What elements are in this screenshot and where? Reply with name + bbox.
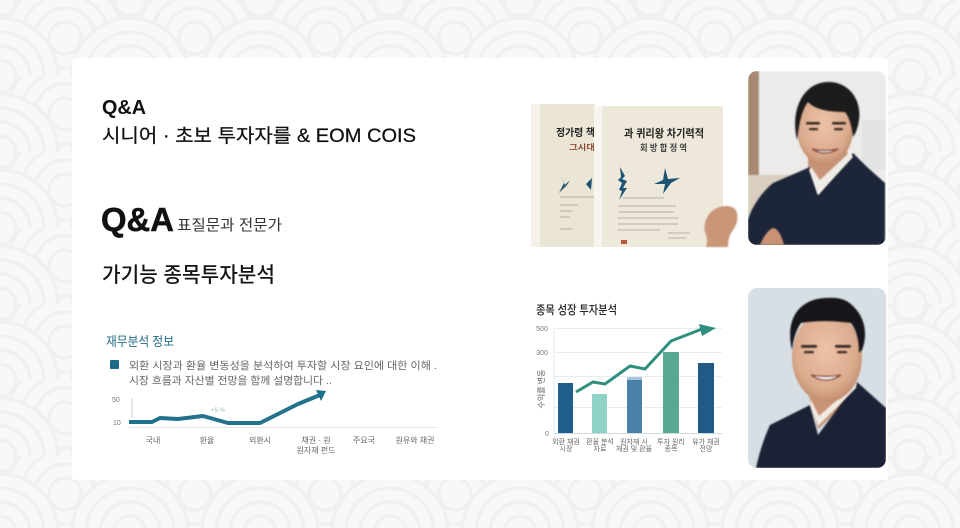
portrait 2 body xyxy=(756,382,886,468)
right chart y labels: 500 xyxy=(536,326,548,333)
right book: 회 방 합 정 역 xyxy=(640,142,687,153)
left chart x labels: 환율 xyxy=(200,435,214,445)
portrait 2 hair xyxy=(790,298,865,353)
portrait 1 face xyxy=(797,102,854,160)
bullet text xyxy=(129,359,437,387)
left chart title: 재무분석 정보 xyxy=(106,334,174,349)
right chart x labels: 시장 xyxy=(560,444,573,453)
book photo xyxy=(531,104,737,247)
left chart trend line with arrow xyxy=(129,390,326,423)
Q&A caption: 표질문과 전문가 xyxy=(177,217,282,234)
right bar chart panel xyxy=(536,303,722,453)
right chart x labels: 자료 xyxy=(594,444,607,453)
book spine xyxy=(594,106,602,247)
left chart axes: 50 xyxy=(112,397,120,404)
right chart y labels: 수익률 변동 xyxy=(536,369,546,409)
heading line: Q&A: Q&A xyxy=(102,97,146,119)
right chart grid xyxy=(554,328,722,434)
portrait 1 hair xyxy=(795,82,859,140)
main white card xyxy=(72,58,888,480)
left book: 그시대 xyxy=(569,142,595,152)
right chart x labels: 환율 분석 xyxy=(586,437,614,446)
right chart x labels: 채권 및 환율 xyxy=(616,444,653,453)
right chart x labels: 종목 xyxy=(665,445,678,453)
left chart x labels: 원유와 채권 xyxy=(395,435,435,445)
left chart axes: +5 % xyxy=(211,408,226,414)
portrait 1 folded hands xyxy=(760,228,784,245)
left chart x labels: 원자재 펀드 xyxy=(296,446,336,455)
heading line: subtitle: 시니어 · 초보 투자자를 & EOM COIS xyxy=(102,125,416,147)
bullet text: 외환 시장과 환율 변동성을 분석하여 투자할 시장 요인에 대한 이해 . xyxy=(129,359,437,372)
portrait 1 body xyxy=(748,153,885,245)
bars xyxy=(558,352,714,433)
left chart panel xyxy=(106,334,437,455)
right book: 과 퀴리왕 차기력적 xyxy=(624,126,704,140)
subheading: 가기능 종목투자분석 xyxy=(102,264,275,287)
right chart x labels xyxy=(552,437,720,453)
portrait 1 features xyxy=(806,122,846,153)
portrait photo 1 xyxy=(748,71,886,245)
portrait 2 features xyxy=(801,345,851,380)
large Q&A: Q&A xyxy=(101,201,174,238)
right chart y labels: 0 xyxy=(545,431,549,438)
left chart axes: 10 xyxy=(113,420,121,427)
book brush motif xyxy=(618,167,680,200)
portrait photo 2 xyxy=(748,288,886,468)
heading: Q&A title block xyxy=(102,97,416,147)
right chart trend arrow xyxy=(576,324,716,392)
left chart x labels: 외환시 xyxy=(249,435,271,445)
right book xyxy=(602,106,723,247)
portrait 1 neck xyxy=(807,150,848,180)
left book: 정가령 책 xyxy=(556,126,595,139)
right chart y labels: 300 xyxy=(536,350,548,357)
right chart x labels: 투자 원리 xyxy=(657,437,685,446)
right chart x labels: 원자재 시 xyxy=(620,437,648,446)
left chart x labels xyxy=(146,435,435,455)
left chart x labels: 채권 · 원 xyxy=(301,435,331,445)
section heading: large Q&A with caption xyxy=(101,201,282,238)
bullet text: 시장 흐름과 자산별 전망을 함께 설명합니다 .. xyxy=(129,375,332,387)
left chart x labels: 국내 xyxy=(146,436,160,445)
portrait 2 collar xyxy=(810,382,857,426)
bullet marker xyxy=(110,360,119,369)
right chart title: 종목 성장 투자분석 xyxy=(536,303,617,317)
left chart axes xyxy=(112,397,437,428)
portrait 2 background xyxy=(748,288,886,468)
right chart x labels: 전망 xyxy=(700,444,713,453)
portrait 1 room background xyxy=(748,71,886,245)
left chart x labels: 주요국 xyxy=(353,436,375,445)
right chart y labels xyxy=(536,326,549,438)
hand holding book xyxy=(705,206,737,247)
portrait 1 collar xyxy=(809,152,853,195)
right chart x labels: 유가 채권 xyxy=(692,437,720,446)
right chart x labels: 외환 채권 xyxy=(552,437,580,446)
left book xyxy=(531,104,595,247)
portrait 2 neck xyxy=(808,394,847,430)
portrait 2 face xyxy=(792,312,862,402)
